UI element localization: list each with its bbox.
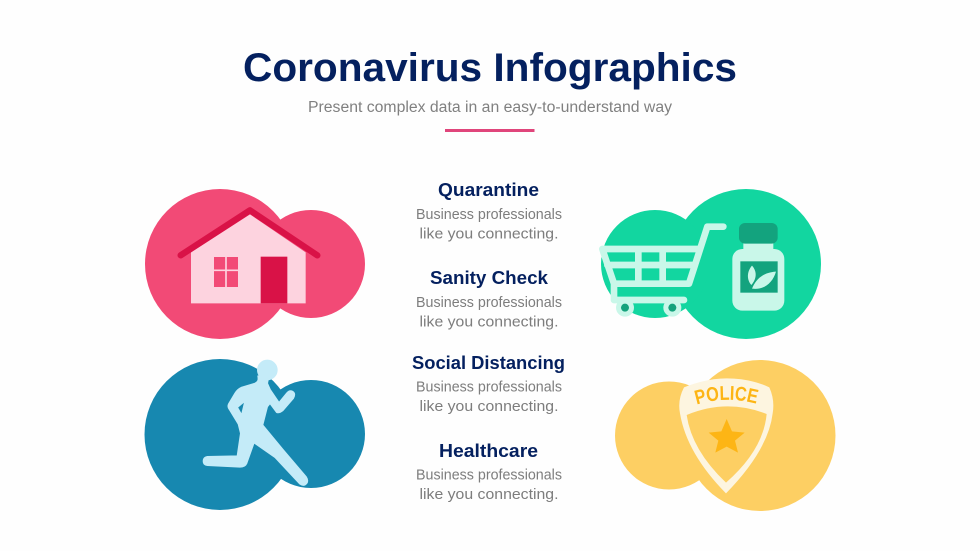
text block: quarantine (416, 179, 562, 242)
text block: healthcare: Healthcare (439, 440, 538, 461)
text block: sanity check: like you connecting. (420, 314, 558, 330)
text block: sanity check (416, 267, 562, 330)
text block: quarantine: Quarantine (438, 179, 539, 200)
text block: healthcare: Business professionals (416, 468, 562, 484)
text block: social distancing: like you connecting. (420, 399, 558, 415)
text block: social distancing: Business professionals (416, 380, 562, 396)
text block: quarantine: Business professionals (416, 207, 562, 223)
title: Coronavirus Infographics (243, 46, 737, 90)
text block: quarantine: like you connecting. (420, 226, 558, 242)
icon: medicine bottle (732, 223, 784, 311)
panel: police badge icon (615, 360, 836, 511)
icon: police badge: POLICE (694, 386, 758, 404)
text block: social distancing: Social Distancing (412, 352, 565, 373)
panel: social distancing runner icon (144, 359, 365, 510)
panel: shopping cart and medicine icons (601, 189, 821, 339)
text block: healthcare (416, 440, 562, 503)
icon: police badge (679, 378, 774, 494)
subtitle: Present complex data in an easy-to-understand way (308, 99, 672, 116)
text block: social distancing (412, 352, 565, 415)
icon: house (181, 210, 317, 303)
icon: shopping cart (602, 227, 723, 317)
panel: quarantine house icon (145, 189, 365, 339)
text block: sanity check: Business professionals (416, 295, 562, 311)
icon: running person (203, 360, 308, 485)
text block: sanity check: Sanity Check (430, 267, 549, 288)
text block: healthcare: like you connecting. (420, 487, 558, 503)
title underline (445, 129, 534, 132)
